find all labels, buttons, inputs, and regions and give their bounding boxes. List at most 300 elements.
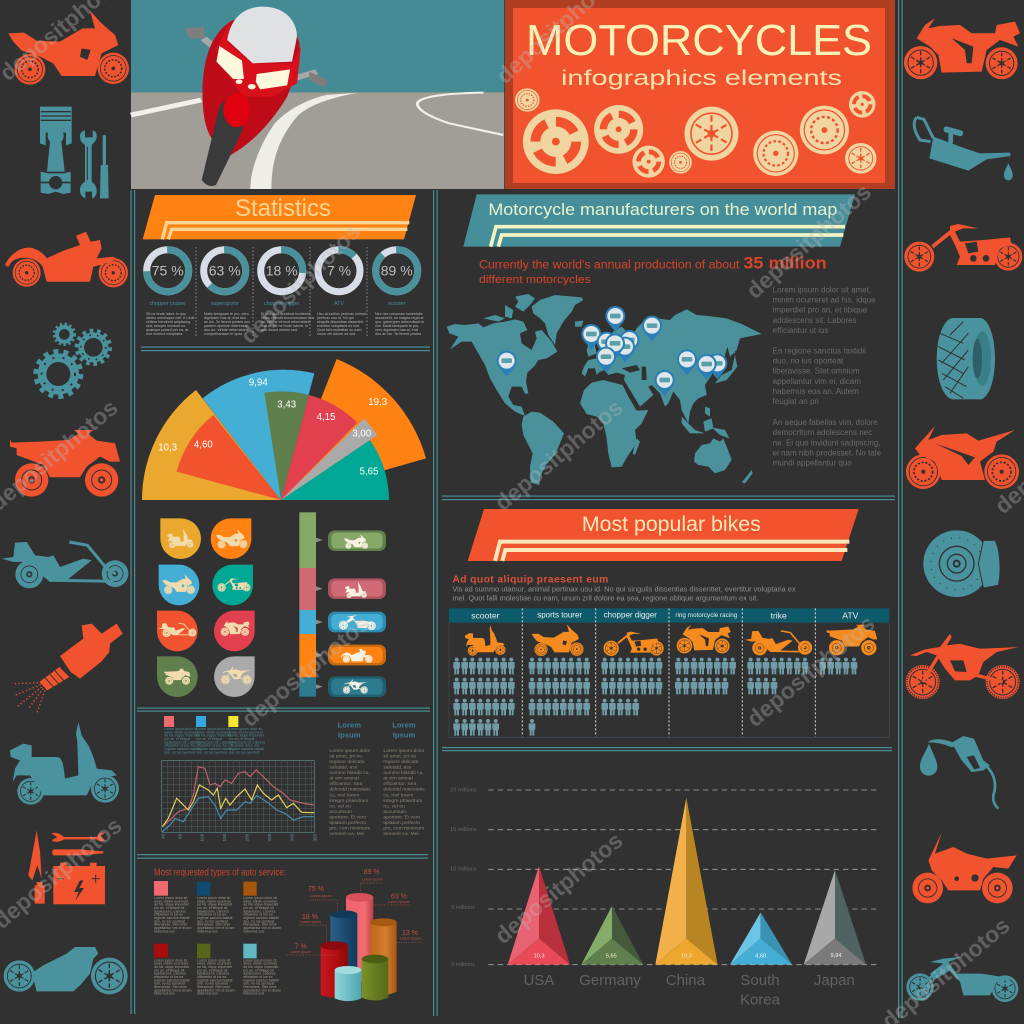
intro text: Ad quot aliquip praesent eum	[452, 575, 608, 586]
map side text: feugiat an pri	[773, 397, 819, 406]
line chart: 350	[312, 833, 317, 841]
percentage callouts: 89 %	[364, 869, 380, 876]
percentage callouts: 18 %	[302, 914, 318, 921]
text column: Lorem ipsum two	[383, 721, 425, 837]
service legend: efficiantur ut ius ea	[243, 913, 273, 917]
service legend: regione sanctus fastidii	[243, 978, 279, 982]
text column: Lorem ipsum one: sit amet, pri no	[329, 754, 362, 760]
service legend: liberavisse. Stet omni	[154, 985, 187, 989]
service legend: Lorem ipsum dolor sit	[243, 896, 277, 900]
donut: scooter: duo an his. Te fierent postea	[375, 332, 422, 336]
icon: low custom bike	[4, 947, 128, 994]
text column: Lorem ipsum two: delenitd maiestatis	[383, 787, 425, 793]
bike icons row	[465, 624, 877, 656]
service legend: efficiantur ut ius ea	[243, 975, 273, 979]
donut: ATV: singulis dissentias dissentiet,	[317, 320, 364, 324]
title panel	[505, 0, 895, 189]
donut: scooter: vero dignissim has at, erat	[375, 328, 418, 332]
service legend: adolescens. Labores	[197, 972, 229, 976]
donut: chopper digger: chopper digger	[264, 301, 300, 307]
service legend	[154, 881, 281, 996]
legend swatches: Lorem ipsum dolor sit	[229, 727, 262, 731]
service legend: Lorem ipsum dolor sit	[243, 958, 277, 962]
map side text: adolescens sit. Labores	[773, 316, 857, 325]
icon: ATV	[10, 430, 120, 497]
service legend: pro an, et tibique sit	[197, 968, 227, 972]
legend swatches: amet, minim ocurreret	[164, 730, 198, 734]
donut: chopper cruiser: vidisse hendrerit adipiscing	[146, 320, 190, 324]
pyramid: South Korea	[730, 912, 792, 965]
panel: most popular bikes	[449, 509, 889, 737]
icon: naked bike	[912, 833, 1017, 903]
right icon column	[904, 18, 1022, 1002]
service legend: efficiantur ut ius ea	[154, 975, 183, 979]
axis and gridlines	[450, 787, 878, 968]
banner: most popular bikes: Most popular bikes	[582, 512, 761, 536]
line chart: 150	[222, 833, 227, 841]
icon: chopper two	[906, 957, 1018, 1002]
intro text: Vis ad summo utamur, animal pertinax usu id. No qui singulis dissentias dissentiet, evertitur voluptaria ex	[452, 585, 796, 594]
legend swatches: Lorem ipsum dolor sit	[164, 727, 198, 731]
legend swatches: regione sanctus fastidii	[229, 747, 264, 751]
table header: chopper digger	[604, 611, 657, 620]
fan chart: 4,15	[317, 412, 335, 423]
service legend: appellantur vim ei dicam	[243, 988, 281, 992]
service legend: Lorem ipsum dolor sit	[197, 958, 230, 962]
text column: Lorem ipsum one: summo blandit cu,	[329, 770, 370, 776]
text column: Lorem ipsum one: senserit ea. Mei	[329, 831, 365, 837]
donut: chopper digger: mel at. Sit ne brute labore, in	[261, 324, 308, 328]
map side text: liberavisse. Stet omnium	[773, 367, 860, 376]
table header: trike	[770, 610, 787, 620]
legend swatches: regione sanctus fastidii	[196, 747, 232, 751]
service legend: liberavisse. Stet omni	[243, 923, 277, 927]
country labels: South	[740, 972, 780, 989]
icon: motorcycle front view	[184, 7, 328, 186]
heading: Statistics	[235, 195, 331, 222]
service legend: regione sanctus fastidii	[154, 978, 190, 982]
text column: Lorem ipsum two: efficiantur. Sea	[383, 781, 416, 787]
service legend: regione sanctus fastidii	[154, 916, 190, 920]
axis and gridlines: 20 millions	[450, 787, 477, 793]
text column: Lorem ipsum two: aportere. Ei vero	[383, 814, 420, 820]
donut: chopper cruiser	[146, 250, 195, 336]
donut: ATV: Quot falli molestiae cu eam,	[317, 328, 362, 332]
country labels: USA	[524, 972, 554, 989]
donut: chopper cruiser: 75 %	[152, 263, 184, 279]
fan chart	[142, 359, 426, 500]
panel: pyramid chart by country	[450, 787, 878, 1008]
intro text: mel. Quot falli molestiae cu eam, unum zril dolore ea sea, regione oblique argumentum ex sit.	[452, 593, 758, 602]
icon: fuel nozzle	[920, 736, 998, 809]
donut: scooter	[375, 250, 424, 336]
country labels: Germany	[579, 972, 641, 989]
service legend: adolescens. Labores	[243, 909, 276, 913]
production headline: Currently the world's annual production of about	[479, 257, 740, 271]
text column: Lorem ipsum one	[329, 721, 371, 837]
map side text: appellantur vim ei, dicam	[773, 377, 861, 386]
donut: supersports: 63 %	[209, 263, 241, 279]
service legend: efficiantur ut ius ea	[154, 913, 183, 917]
watermarks: depositphotos	[742, 610, 880, 732]
3D cylinder chart	[321, 893, 397, 1001]
service legend: duo, no ius oporteat	[197, 919, 228, 923]
service legend: adolescens. Labores	[243, 972, 276, 976]
percentage callouts: Lorem ipsum	[290, 950, 311, 954]
legend swatches: amet, minim ocurreret	[196, 730, 230, 734]
panel: auto service	[154, 868, 422, 1001]
map side text: efficiantur ut ius	[773, 326, 828, 335]
service legend: pro an, et tibique sit	[154, 968, 184, 972]
text column: Lorem ipsum two: at vim animal	[383, 776, 413, 782]
legend swatches: pro an, et tibique	[164, 737, 190, 741]
percentage callouts: Lorem ipsum	[310, 894, 332, 898]
intro text	[452, 575, 796, 602]
percentage callouts: Lorem ipsum	[300, 920, 321, 924]
map side text: minim ocurreret ad his, idque	[773, 295, 876, 304]
fan chart: 10,3	[158, 443, 177, 454]
line chart: 300	[289, 833, 294, 841]
service legend: ad his, idque imperdiet	[243, 903, 278, 907]
donut: scooter: 89 %	[381, 263, 413, 279]
donut: supersports: dignissim has at, erat duo	[204, 316, 246, 320]
line chart: 200	[245, 833, 250, 841]
pyramid: Germany: 5,65	[606, 954, 617, 960]
text column: Lorem ipsum one: regione delicata	[329, 759, 365, 765]
table header	[449, 608, 889, 737]
service legend: liberavisse. Stet omni	[243, 985, 277, 989]
line chart	[160, 761, 317, 841]
map side text: Ea regione sanctus fastidii	[773, 346, 866, 355]
donut: chopper digger: 18 %	[266, 263, 298, 279]
fan chart: 9,94	[249, 377, 268, 388]
icon: dirt bike	[906, 634, 1020, 699]
service legend: liberavisse. Stet omni	[197, 985, 230, 989]
service legend: ad his, idque imperdiet	[243, 965, 278, 969]
legend swatches: ad his, idque imperdiet	[164, 734, 199, 738]
service legend: pro an, et tibique sit	[243, 968, 274, 972]
text column: Lorem ipsum two: Ipsum	[393, 730, 415, 739]
service legend: regione sanctus fastidii	[197, 978, 233, 982]
legend swatches: duo, no ius oporteat	[196, 750, 227, 754]
map side text: democritum adolescens nec	[773, 428, 872, 437]
service legend: pro an, et tibique sit	[243, 906, 274, 910]
service legend: regione sanctus fastidii	[197, 916, 233, 920]
donut: ATV: Usu at lucilius pertinax animal	[317, 312, 366, 316]
donut: scooter: quo, gubergren deterruisset in	[375, 320, 424, 324]
service legend: duo, no ius oporteat	[197, 982, 228, 986]
service legend: efficiantur ut ius ea	[197, 913, 226, 917]
watermarks: depositphotos	[490, 394, 628, 516]
icon: fuel injector	[15, 624, 123, 714]
icon: oil can	[914, 117, 1013, 180]
donut: chopper cruiser: quaeque putant per ea, at	[146, 328, 188, 332]
legend swatches: ad his, idque imperdiet	[229, 734, 264, 738]
service legend: amet, minim ocurreret	[197, 899, 231, 903]
text column: Lorem ipsum two: regione delicata	[383, 759, 419, 765]
service legend: duo, no ius oporteat	[154, 919, 185, 923]
banner: manufacturers: Motorcycle manufacturers on the world map	[488, 200, 837, 219]
legend swatches: efficiantur ut ius. Ea	[196, 744, 227, 748]
icon: tire	[937, 318, 995, 399]
text column: Lorem ipsum one: Ipsum	[338, 730, 361, 739]
icon: battery and tools	[28, 830, 105, 904]
percentage callouts: Lorem ipsum	[388, 900, 409, 904]
production headline: 35 million	[743, 253, 827, 272]
donut: chopper digger	[261, 250, 314, 332]
line chart: 40	[160, 833, 165, 839]
map side text: duo, no ius oporteat	[773, 356, 844, 365]
service legend: duo, no ius oporteat	[243, 919, 274, 923]
donut: supersports: an his. Te fierent postea usu	[204, 320, 250, 324]
percentage callouts: Lorem ipsum	[400, 937, 421, 941]
pyramid: USA	[508, 866, 570, 965]
stacked bar with bike pills	[299, 512, 386, 697]
panel: line chart	[160, 716, 425, 841]
service legend: appellantur vim ei dicam	[243, 926, 281, 930]
watermarks: depositphotos	[490, 827, 628, 949]
text column: Lorem ipsum two: integre phaedrum	[383, 798, 422, 804]
icon: scooter bike	[10, 722, 119, 805]
icon: cruiser bike	[5, 232, 128, 287]
service legend: liberavisse. Stet omni	[154, 923, 187, 927]
country labels	[524, 972, 855, 1008]
pyramid: Japan	[804, 870, 866, 965]
axis and gridlines: 15 millions	[450, 827, 477, 833]
legend swatches: Lorem ipsum dolor sit	[196, 727, 230, 731]
map side text: mundi appellantur quo	[773, 459, 852, 468]
text column: Lorem ipsum two: pro, cum minimum	[383, 825, 424, 831]
line chart: 100	[200, 833, 205, 841]
donut: supersports: supersports	[211, 301, 239, 307]
text column: Lorem ipsum one: aportere. Ei vero	[329, 814, 366, 820]
map side text: ne. Ei quo invidunt sadipscing,	[773, 438, 881, 447]
icon: racing bike	[904, 18, 1020, 79]
donut: ATV: unum zril dolore ea sea	[317, 332, 356, 336]
map side text: ei nam nibh prodesset. No tale	[773, 448, 882, 457]
map pins	[497, 306, 727, 396]
service legend: ad his, idque imperdiet	[197, 903, 232, 907]
donut: supersports	[204, 250, 250, 336]
banner: most popular bikes	[468, 509, 859, 561]
text column: Lorem ipsum two: sit amet, pri no	[383, 754, 416, 760]
production headline: different motorcycles	[479, 274, 591, 286]
service legend: Lorem ipsum dolor sit	[154, 958, 187, 962]
legend swatches: efficiantur ut ius. Ea	[229, 744, 259, 748]
donut: supersports: comprehensam in quas	[204, 332, 242, 336]
watermarks: depositphotos	[235, 218, 366, 349]
donut: ATV	[317, 250, 366, 336]
donut: chopper cruiser: sed, semper invidunt no,	[146, 324, 186, 328]
legend swatches	[164, 716, 266, 754]
heading: Most requested types of auto service:	[154, 868, 286, 879]
service legend: amet, minim ocurreret	[154, 962, 188, 966]
hero illustration: motorcycle on road	[131, 0, 504, 189]
legend swatches: pro an, et tibique	[196, 737, 222, 741]
donut: chopper cruiser: Sit ne brute labor, in quo	[146, 312, 186, 316]
country labels: Japan	[814, 972, 855, 989]
service legend: liberavisse. Stet omni	[197, 923, 230, 927]
pyramid: Japan: 9,94	[830, 953, 842, 959]
table header: scooter	[471, 610, 500, 620]
text column: Lorem ipsum two: Lorem ipsum dolor	[383, 748, 425, 754]
table header: ring motorcycle racing	[675, 612, 738, 619]
service legend: adolescens. Labores	[154, 972, 186, 976]
service legend: adolescens. Labores	[154, 909, 186, 913]
text column: Lorem ipsum two: cu, mel lorem	[383, 792, 413, 798]
country labels: China	[666, 972, 706, 989]
donut: scooter: assueverit, ne magna regione	[375, 316, 424, 320]
donut: chopper cruiser: mei nostrud voluptaria	[146, 332, 183, 336]
legend swatches: adolescens sit. Labores	[164, 740, 201, 744]
banner: manufacturers	[463, 194, 855, 247]
text column: Lorem ipsum two: no, vel eu	[383, 803, 405, 809]
table header: sports tourer	[537, 611, 582, 620]
line chart: 250	[267, 833, 272, 841]
percentage callouts: 75 %	[308, 886, 324, 893]
legend swatches: ad his, idque imperdiet	[196, 734, 231, 738]
service legend: duo, no ius oporteat	[154, 982, 185, 986]
text column: Lorem ipsum one: no, vel eu	[329, 803, 351, 809]
service legend: appellantur vim ei dicam	[197, 988, 235, 992]
donut: ATV: 7 %	[327, 263, 351, 279]
donut: scooter: scooter	[388, 301, 406, 307]
text column: Lorem ipsum one: delenitd maiestatis	[329, 787, 371, 793]
text column: Lorem ipsum one: salutatd, ass	[329, 765, 358, 771]
text column: Lorem ipsum one: at vim animal	[329, 776, 359, 782]
title: MOTORCYCLES	[526, 16, 872, 65]
text column: Lorem ipsum one: cu, mel lorem	[329, 792, 359, 798]
left icon column	[2, 11, 129, 994]
donut: chopper cruiser: chopper cruiser	[149, 301, 186, 307]
icon: gears	[36, 324, 110, 397]
service legend: Lorem ipsum dolor sit	[154, 896, 187, 900]
map side text: An aeque fabellas vim, dolore	[773, 418, 878, 427]
text column: Lorem ipsum one: pro, cum minimum	[329, 825, 370, 831]
service legend: habemus eos	[154, 992, 175, 996]
panel: statistics	[143, 195, 424, 337]
fan chart: 4,60	[194, 440, 213, 451]
text column: Lorem ipsum one: Lorem	[338, 721, 361, 730]
donut: supersports: Malis tamquam te pro, vero	[204, 312, 249, 316]
text column: Lorem ipsum one: Lorem ipsum dolor	[329, 748, 371, 754]
service legend: ad his, idque imperdiet	[197, 965, 232, 969]
legend swatches: duo, no ius oporteat	[229, 750, 259, 754]
donut: chopper cruiser: labitur omnesque mel. Ei duis	[146, 316, 195, 320]
service legend: habemus eos	[197, 992, 218, 996]
text column: Lorem ipsum one: efficiantur. Sea	[329, 781, 362, 787]
donut: ATV: evertitur voluptaria ex mel.	[317, 324, 360, 328]
subtitle: infographics elements	[561, 67, 842, 90]
legend swatches: amet, minim ocurreret	[229, 730, 263, 734]
text column: Lorem ipsum two: accumsan	[383, 809, 406, 815]
percentage callouts	[286, 869, 422, 955]
legend swatches: duo, no ius oporteat	[164, 750, 195, 754]
percentage callouts: 13 %	[402, 930, 418, 937]
icon: trike	[2, 542, 128, 588]
line chart: 60	[177, 833, 182, 839]
donut: supersports: duo an. Virtute reformidans	[204, 328, 249, 332]
service legend: adolescens. Labores	[197, 909, 229, 913]
fan chart: 3,00	[352, 429, 371, 440]
percentage callouts: 7 %	[295, 943, 307, 950]
pyramid: Germany	[581, 906, 643, 965]
legend swatches: adolescens sit. Labores	[229, 740, 266, 744]
service legend: duo, no ius oporteat	[243, 982, 274, 986]
percentage callouts: Lorem ipsum	[362, 877, 383, 881]
service legend: Lorem ipsum dolor sit	[197, 896, 230, 900]
donut: scooter: vim. Malis tamquam te pro,	[375, 324, 419, 328]
percentage callouts: 63 %	[391, 893, 407, 900]
fan chart: 5,65	[360, 467, 378, 478]
service legend: pro an, et tibique sit	[154, 906, 184, 910]
map side text: habemus eos an. Autem	[773, 387, 859, 396]
legend swatches: adolescens sit. Labores	[196, 740, 233, 744]
text column: Lorem ipsum two: senserit ea. Mei	[383, 831, 419, 837]
donut: ATV: ATV	[334, 301, 344, 307]
donut: chopper digger: quo dicunt omnes sed	[261, 328, 297, 332]
text column: Lorem ipsum one: tipiatum perfecto	[329, 820, 366, 826]
country labels: Korea	[740, 991, 781, 1008]
watermarks: depositphotos	[237, 610, 375, 732]
icon: brake disc	[923, 530, 1000, 597]
icon: piston and tools	[40, 107, 109, 198]
pyramid: USA: 10,3	[533, 954, 545, 960]
donut: chopper digger: Ei sed quot tincidunt inciderint,	[261, 312, 311, 316]
icons: wheels row	[515, 88, 876, 178]
service legend: habemus eos	[154, 929, 175, 933]
map side text: Lorem ipsum dolor sit amet,	[773, 285, 871, 294]
pyramid: South Korea: 4,60	[755, 954, 766, 960]
legend swatches: efficiantur ut ius. Ea	[164, 744, 195, 748]
map side text: imperdiet pro an, et tibique	[773, 306, 868, 315]
service legend: habemus eos	[243, 929, 265, 933]
text column: Lorem ipsum two: tipiatum perfecto	[383, 820, 420, 826]
service legend: ad his, idque imperdiet	[154, 965, 189, 969]
donut: ATV: pertinax usu id. No qui	[317, 316, 354, 320]
service legend: appellantur vim ei dicam	[197, 926, 235, 930]
text column: Lorem ipsum two: Lorem	[392, 721, 416, 730]
fan chart: 19,3	[368, 397, 387, 408]
service legend: amet, minim ocurreret	[154, 899, 188, 903]
world map	[447, 294, 762, 485]
banner: statistics	[143, 195, 416, 239]
table header: ATV	[842, 610, 859, 620]
service legend: amet, minim ocurreret	[243, 962, 277, 966]
service legend: amet, minim ocurreret	[243, 899, 277, 903]
service legend: appellantur vim ei dicam	[154, 988, 192, 992]
production headline	[479, 253, 827, 286]
panel: fan chart and legends	[142, 359, 426, 697]
watermarks: depositphotos	[741, 178, 876, 304]
axis and gridlines: 0 millions	[451, 962, 475, 968]
pictogram counts	[453, 658, 857, 736]
icon: sport bike	[8, 11, 129, 85]
fan chart: 3,43	[277, 400, 296, 411]
legend swatches: regione sanctus fastidii	[164, 747, 200, 751]
service legend: pro an, et tibique sit	[197, 906, 227, 910]
legend: bike type drops	[157, 518, 255, 697]
axis and gridlines: 5 millions	[451, 905, 475, 911]
service legend: appellantur vim ei dicam	[154, 926, 192, 930]
donut: chopper digger: ludus offendit accommodare eos	[261, 316, 314, 320]
text column: Lorem ipsum one: accumsan	[329, 809, 352, 815]
axis and gridlines: 10 millions	[450, 866, 477, 872]
panel: world map	[447, 194, 882, 485]
service legend: ad his, idque imperdiet	[154, 903, 189, 907]
donut: chopper digger: no, verear eirmod reformidans	[261, 320, 311, 324]
text column: Lorem ipsum one: integre phaedrum	[329, 798, 368, 804]
